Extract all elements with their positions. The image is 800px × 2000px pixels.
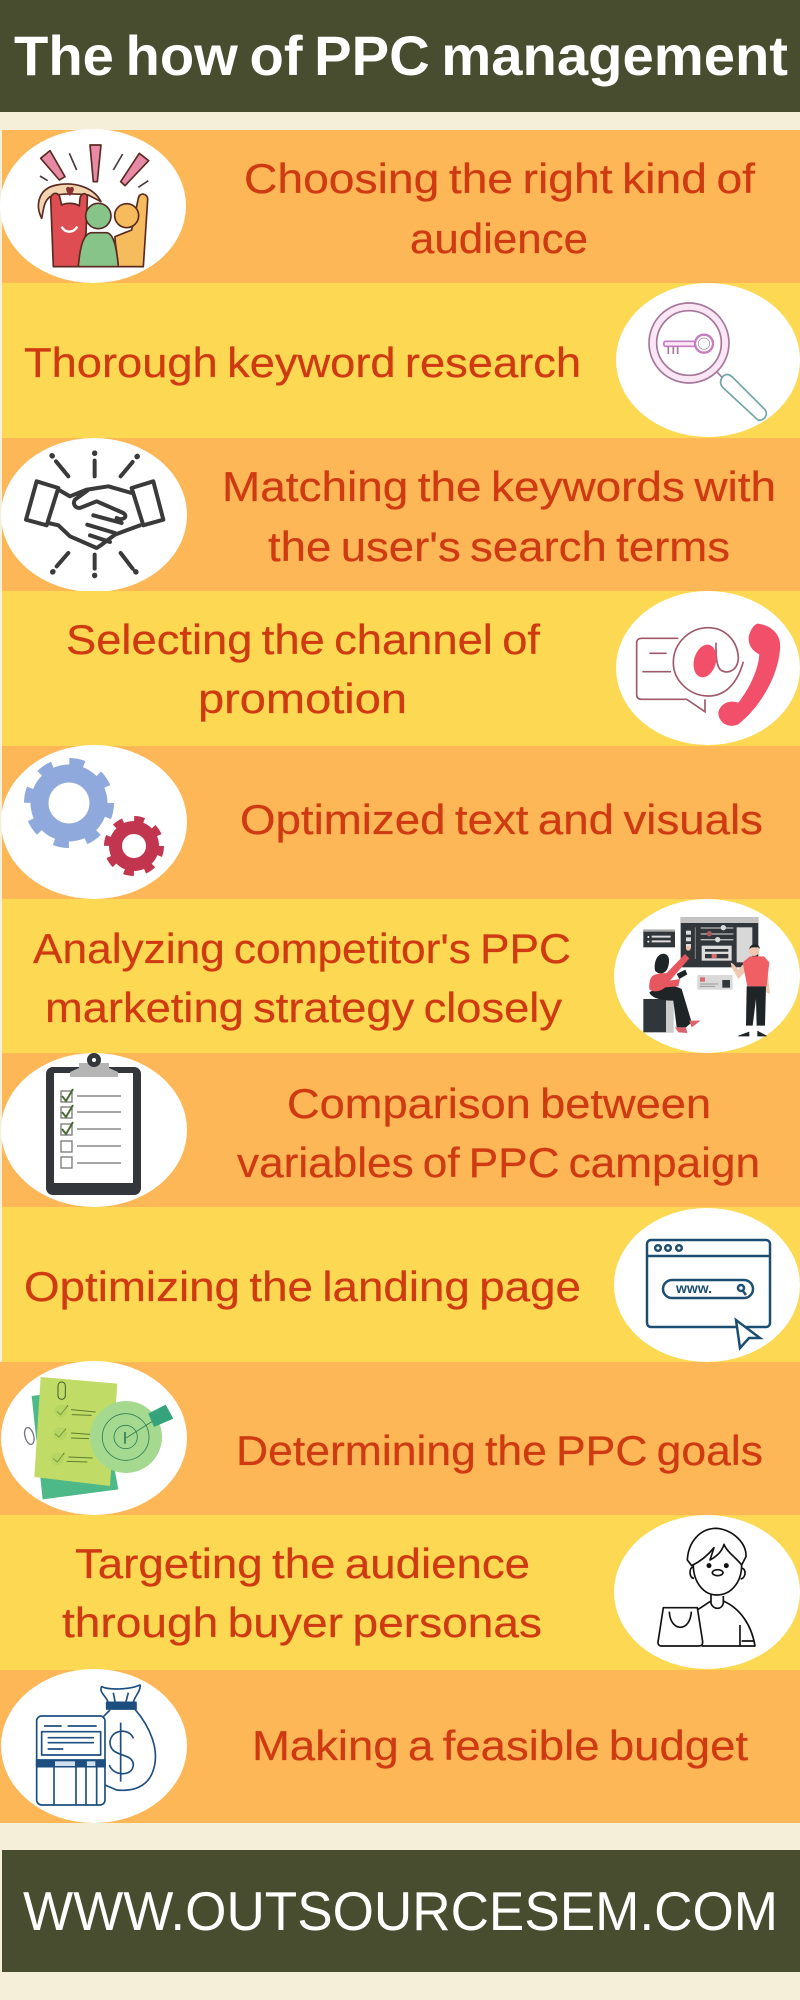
footer banner	[2, 1850, 800, 1972]
text: comparison between variables: Comparison between	[287, 1080, 711, 1127]
panel: item 3 matching keywords	[1, 438, 800, 592]
panel: item 11 feasible budget	[0, 1669, 800, 1823]
panel: item 9 PPC goals	[0, 1361, 800, 1515]
icon: two people at dashboard	[643, 917, 770, 1036]
text: analyzing competitors: marketing strategy closely	[45, 984, 562, 1031]
text: analyzing competitors: Analyzing competitor's PPC	[33, 925, 571, 972]
panel: item 8 landing page	[2, 1207, 800, 1362]
panel: item 2 keyword research	[2, 283, 800, 438]
icon: key under magnifier	[649, 303, 766, 420]
text: targeting the audience: through buyer personas	[62, 1599, 542, 1646]
icon: clipboard checklist	[46, 1053, 141, 1195]
title banner	[0, 0, 800, 112]
text: determining the ppc goals: Determining the PPC goals	[236, 1427, 763, 1474]
text: selecting the channel: Selecting the channel of	[66, 616, 540, 663]
text: comparison between variables: variables of PPC campaign	[237, 1139, 760, 1186]
panel: item 10 buyer personas	[0, 1515, 800, 1670]
panel: item 5 text and visuals	[1, 745, 800, 899]
title banner: The how of PPC management	[14, 24, 788, 87]
text: making a feasible budget: Making a feasible budget	[252, 1722, 748, 1769]
text: matching the keywords: Matching the keywords with	[222, 463, 776, 510]
footer banner: WWW.OUTSOURCESEM.COM	[23, 1880, 778, 1942]
panel: item 4 channel of promotion	[2, 591, 800, 746]
icon: person with shopping bag	[658, 1528, 755, 1646]
icon: browser window: www.	[675, 1280, 712, 1296]
icon: goal papers and target	[23, 1377, 173, 1499]
text: choosing the right kind of audience: Choosing the right kind of	[244, 155, 755, 202]
icon: money bag and budget sheet	[37, 1685, 155, 1805]
text: optimizing the landing page: Optimizing the landing page	[24, 1263, 581, 1310]
icon: browser window	[647, 1240, 770, 1348]
text: targeting the audience: Targeting the audience	[75, 1540, 530, 1587]
text: selecting the channel: promotion	[198, 675, 407, 722]
panel: item 6 competitor analysis	[2, 899, 800, 1053]
icon: gears	[28, 762, 161, 873]
icon: cheering audience	[38, 145, 149, 267]
panel: item 7 comparison of variables	[1, 1053, 800, 1207]
text: choosing the right kind of audience: audience	[410, 215, 588, 262]
icon: email and phone	[637, 624, 780, 726]
panel: item 1 audience	[0, 129, 800, 283]
text: thorough keyword research: Thorough keyword research	[24, 339, 581, 386]
text: optimized text and visuals: Optimized text and visuals	[240, 796, 763, 843]
icon: handshake	[26, 453, 163, 576]
text: matching the keywords: the user's search terms	[268, 523, 730, 570]
